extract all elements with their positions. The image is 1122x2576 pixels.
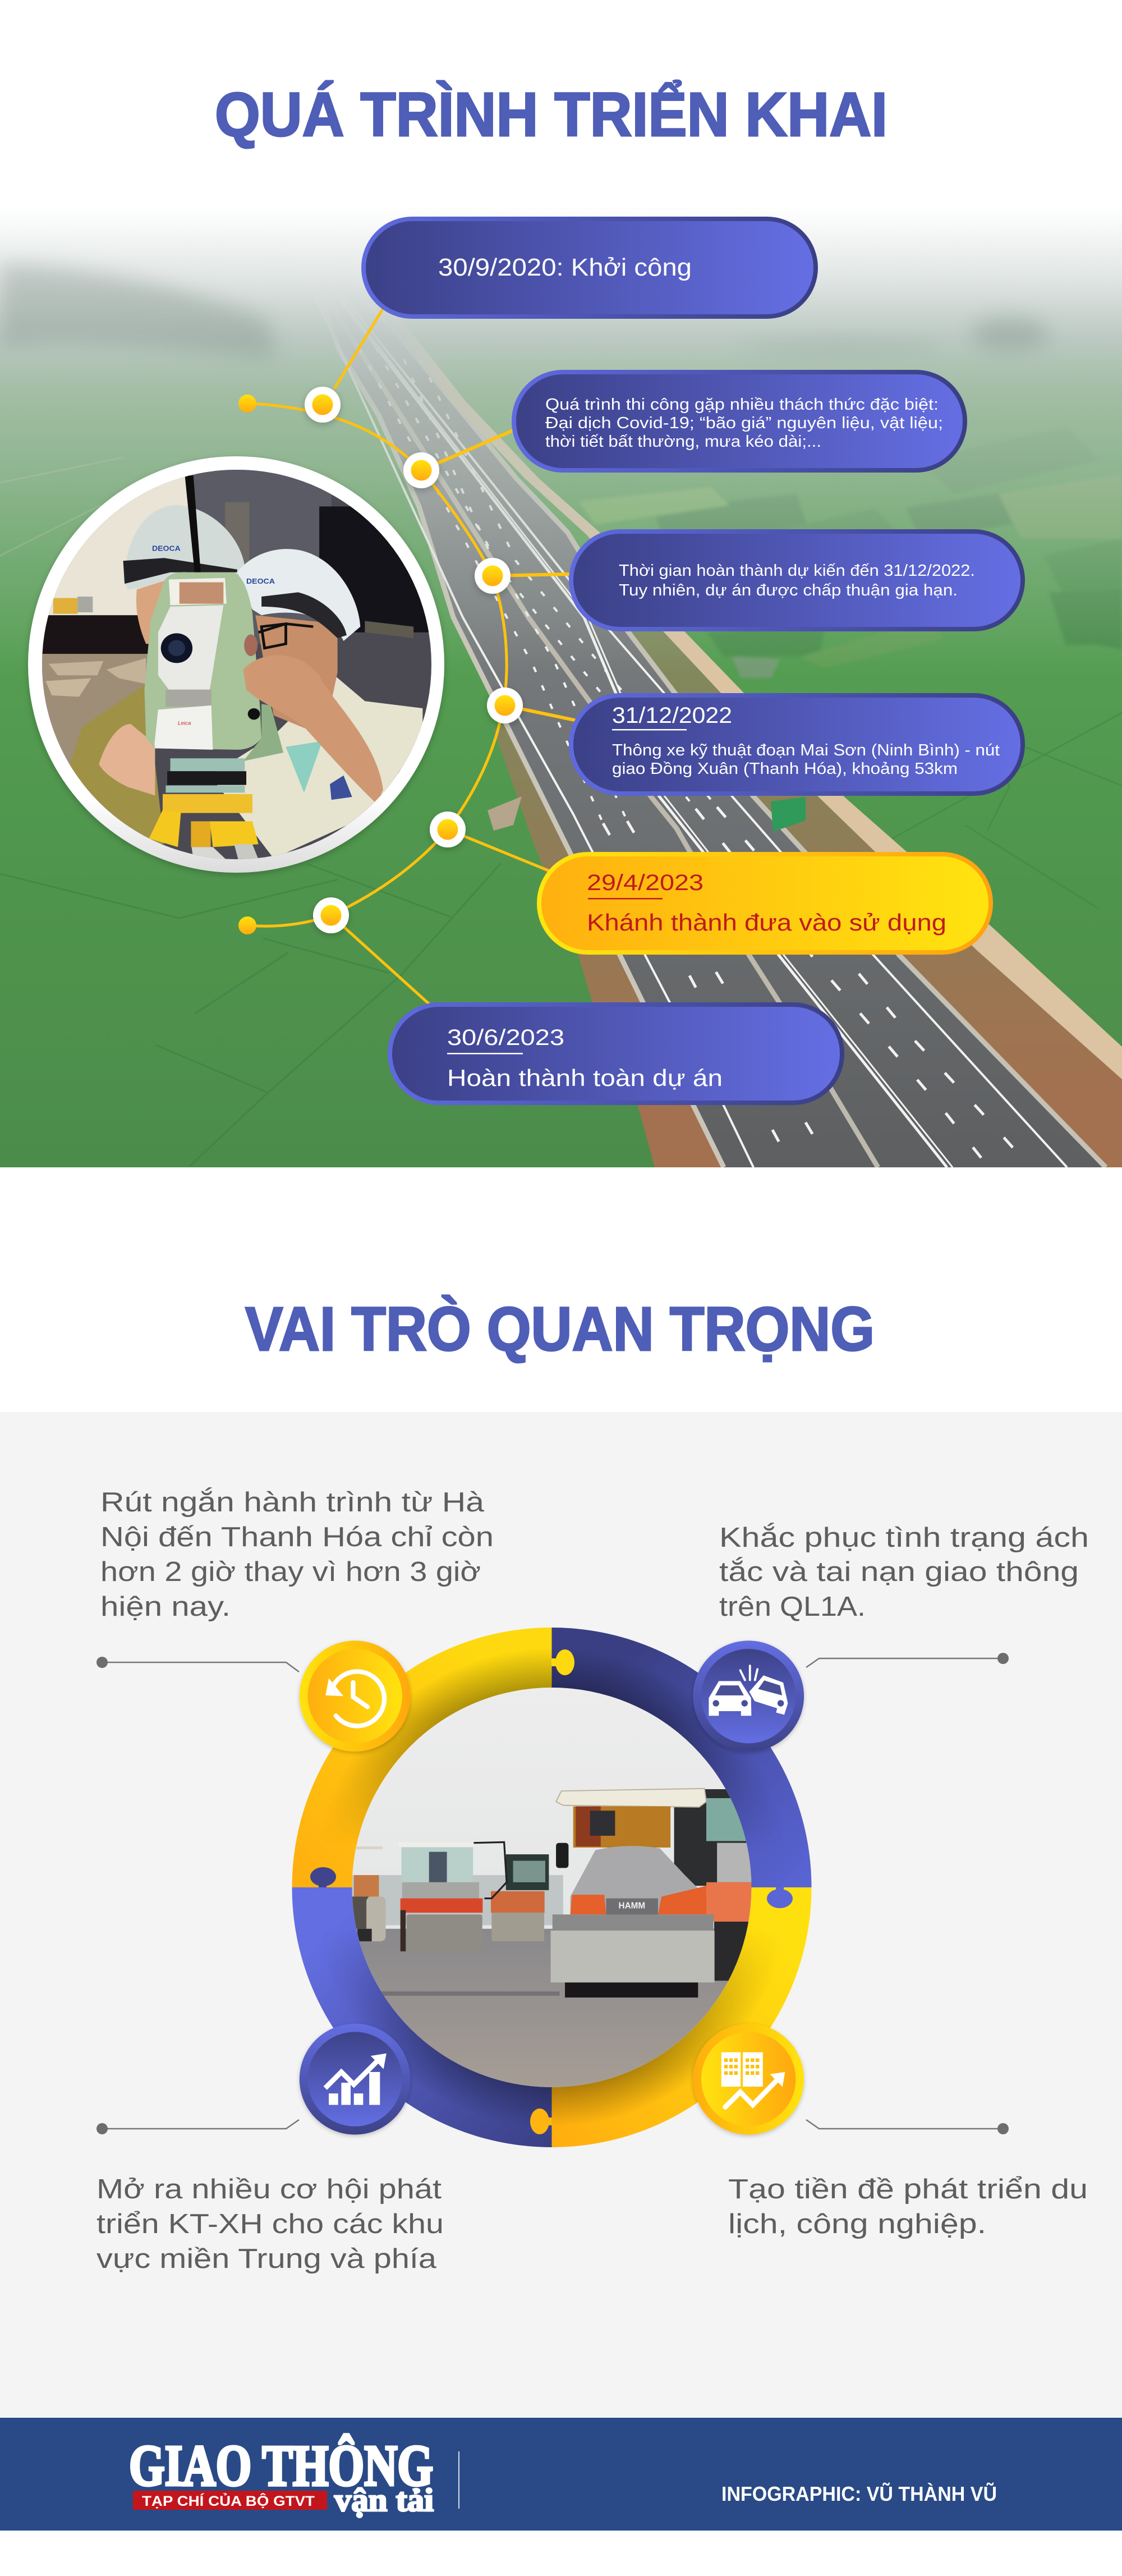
text block: reduce congestion: trên QL1A.: [719, 1592, 866, 1622]
callout: 30/9/2020 groundbreaking: [364, 219, 816, 317]
text block: tourism and industry: Tạo tiền đề phát triển du: [728, 2174, 1088, 2204]
callout: 30/6/2023 project completion: 30/6/2023: [447, 1025, 564, 1050]
panel: aerial expressway photo background: [0, 207, 1122, 1167]
road barriers and lane markings: [333, 338, 1107, 1167]
large roller bumper and skirt: [553, 1914, 714, 1931]
antenna: [185, 475, 201, 572]
front face: [255, 615, 338, 735]
logo: Giao Thong Van Tai: vận tải: [334, 2482, 434, 2518]
text block: tourism and industry: [728, 2174, 1088, 2239]
callout: 29/4/2023 inauguration highlighted: [539, 854, 991, 952]
second roller: [398, 1842, 473, 1847]
timeline end dots: [238, 395, 256, 934]
callout: 31/12/2022 technical opening: 31/12/2022: [612, 703, 732, 728]
total station: [144, 572, 261, 750]
photo: road rollers: [348, 1682, 756, 2093]
icon: car crash: [693, 1640, 804, 1752]
text block: socio-economic opportunities: [96, 2174, 444, 2274]
far right roller: [674, 1789, 753, 1886]
leader lines: [96, 1653, 1009, 2134]
photo: surveyors with total station: DEOCA: [152, 544, 181, 552]
heading: important role: VAI TRÒ QUAN TRỌNG: [245, 1295, 875, 1364]
tripod head: [171, 758, 245, 771]
text block: shorter journey: Rút ngắn hành trình từ Hà: [100, 1487, 485, 1518]
yellow tripod: [163, 794, 252, 813]
text block: shorter journey: [100, 1487, 494, 1622]
left field boundaries: [0, 457, 501, 1166]
front worker shirt: [210, 675, 422, 859]
icon: growth chart: [300, 2024, 411, 2135]
callout: 30/9/2020 groundbreaking: 30/9/2020: Khởi công: [438, 254, 692, 281]
large roller body: [571, 1846, 706, 1914]
callout: expected completion and extension: [571, 531, 1023, 629]
distant tree lines: [0, 264, 1049, 359]
sandy embankment: [406, 340, 1122, 1079]
front helmet: [237, 549, 360, 641]
callout: 31/12/2022 technical opening: [571, 695, 1023, 794]
HAMM label: HAMM: [619, 1901, 645, 1910]
timeline nodes: [305, 387, 523, 933]
text block: shorter journey: hiện nay.: [100, 1592, 231, 1622]
right rice and corn plots: [581, 476, 1122, 679]
panel: footer: [0, 2418, 1122, 2531]
callout: 31/12/2022 technical opening: giao Đồng Xuân (Thanh Hóa), khoảng 53km: [612, 760, 958, 778]
callout: 30/6/2023 project completion: [390, 1005, 842, 1103]
far left roller: [354, 1846, 383, 1849]
credit: INFOGRAPHIC: VŨ THÀNH VŨ: [721, 2482, 997, 2505]
photo: surveyors with total station: Leica: [178, 721, 191, 726]
callout: construction challenges: Đại dịch Covid-19; “bão giá” nguyên liệu, vật liệu;: [545, 414, 943, 432]
road carriageway: [351, 364, 1102, 1167]
text block: tourism and industry: lịch, công nghiệp.: [728, 2209, 986, 2239]
text block: reduce congestion: tắc và tai nạn giao thông: [719, 1557, 1079, 1587]
callout: 30/6/2023 project completion: Hoàn thành toàn dự án: [447, 1065, 723, 1091]
puzzle ring: [292, 1628, 811, 2147]
text block: socio-economic opportunities: Mở ra nhiều cơ hội phát: [96, 2174, 442, 2204]
callout: 29/4/2023 inauguration highlighted: Khánh thành đưa vào sử dụng: [587, 909, 946, 936]
logo: Giao Thong Van Tai: TẠP CHÍ CỦA BỘ GTVT: [142, 2492, 315, 2509]
text block: reduce congestion: Khắc phục tình trạng ách: [719, 1523, 1089, 1553]
timeline curve and connectors: [247, 309, 574, 1004]
large roller canopy and cab: [556, 1789, 706, 1807]
puzzle knobs: [310, 1649, 793, 2134]
third roller: [506, 1854, 549, 1890]
heading: process: QUÁ TRÌNH TRIỂN KHAI: [215, 80, 888, 149]
logo: Giao Thong Van Tai: [129, 2433, 459, 2518]
callout: expected completion and extension: Thời gian hoàn thành dự kiến đến 31/12/2022.: [619, 562, 975, 580]
rear helmet: [123, 505, 245, 589]
callout: construction challenges: [514, 372, 965, 470]
icon: buildings and upward trend: [693, 2024, 804, 2135]
fog overlay: [0, 207, 1122, 673]
photo: surveyors with total station: DEOCA: [246, 577, 275, 585]
text block: socio-economic opportunities: vực miền Trung và phía: [96, 2244, 437, 2274]
text block: shorter journey: hơn 2 giờ thay vì hơn 3 giờ: [100, 1557, 481, 1587]
text block: socio-economic opportunities: triển KT-XH cho các khu: [96, 2209, 444, 2239]
callout: expected completion and extension: Tuy nhiên, dự án được chấp thuận gia hạn.: [619, 581, 958, 599]
panel: roles background: [0, 1412, 1122, 2418]
text block: shorter journey: Nội đến Thanh Hóa chỉ còn: [100, 1522, 494, 1552]
left hand: [99, 724, 155, 796]
logo: Giao Thong Van Tai: GIAO THÔNG: [129, 2433, 433, 2498]
icon: clock history: [300, 1640, 411, 1752]
front arm and hand: [243, 655, 383, 804]
dirt verges: [494, 724, 724, 1167]
callout: construction challenges: thời tiết bất thường, mưa kéo dài;...: [545, 433, 821, 451]
photo: surveyors with total station: [28, 456, 444, 873]
callout: 31/12/2022 technical opening: Thông xe kỹ thuật đoạn Mai Sơn (Ninh Bình) - nút: [612, 741, 1000, 759]
text block: reduce congestion: [719, 1523, 1089, 1622]
callout: construction challenges: Quá trình thi công gặp nhiều thách thức đặc biệt:: [545, 396, 939, 414]
callout: 29/4/2023 inauguration highlighted: 29/4/2023: [587, 870, 703, 895]
road sign: [771, 797, 806, 832]
